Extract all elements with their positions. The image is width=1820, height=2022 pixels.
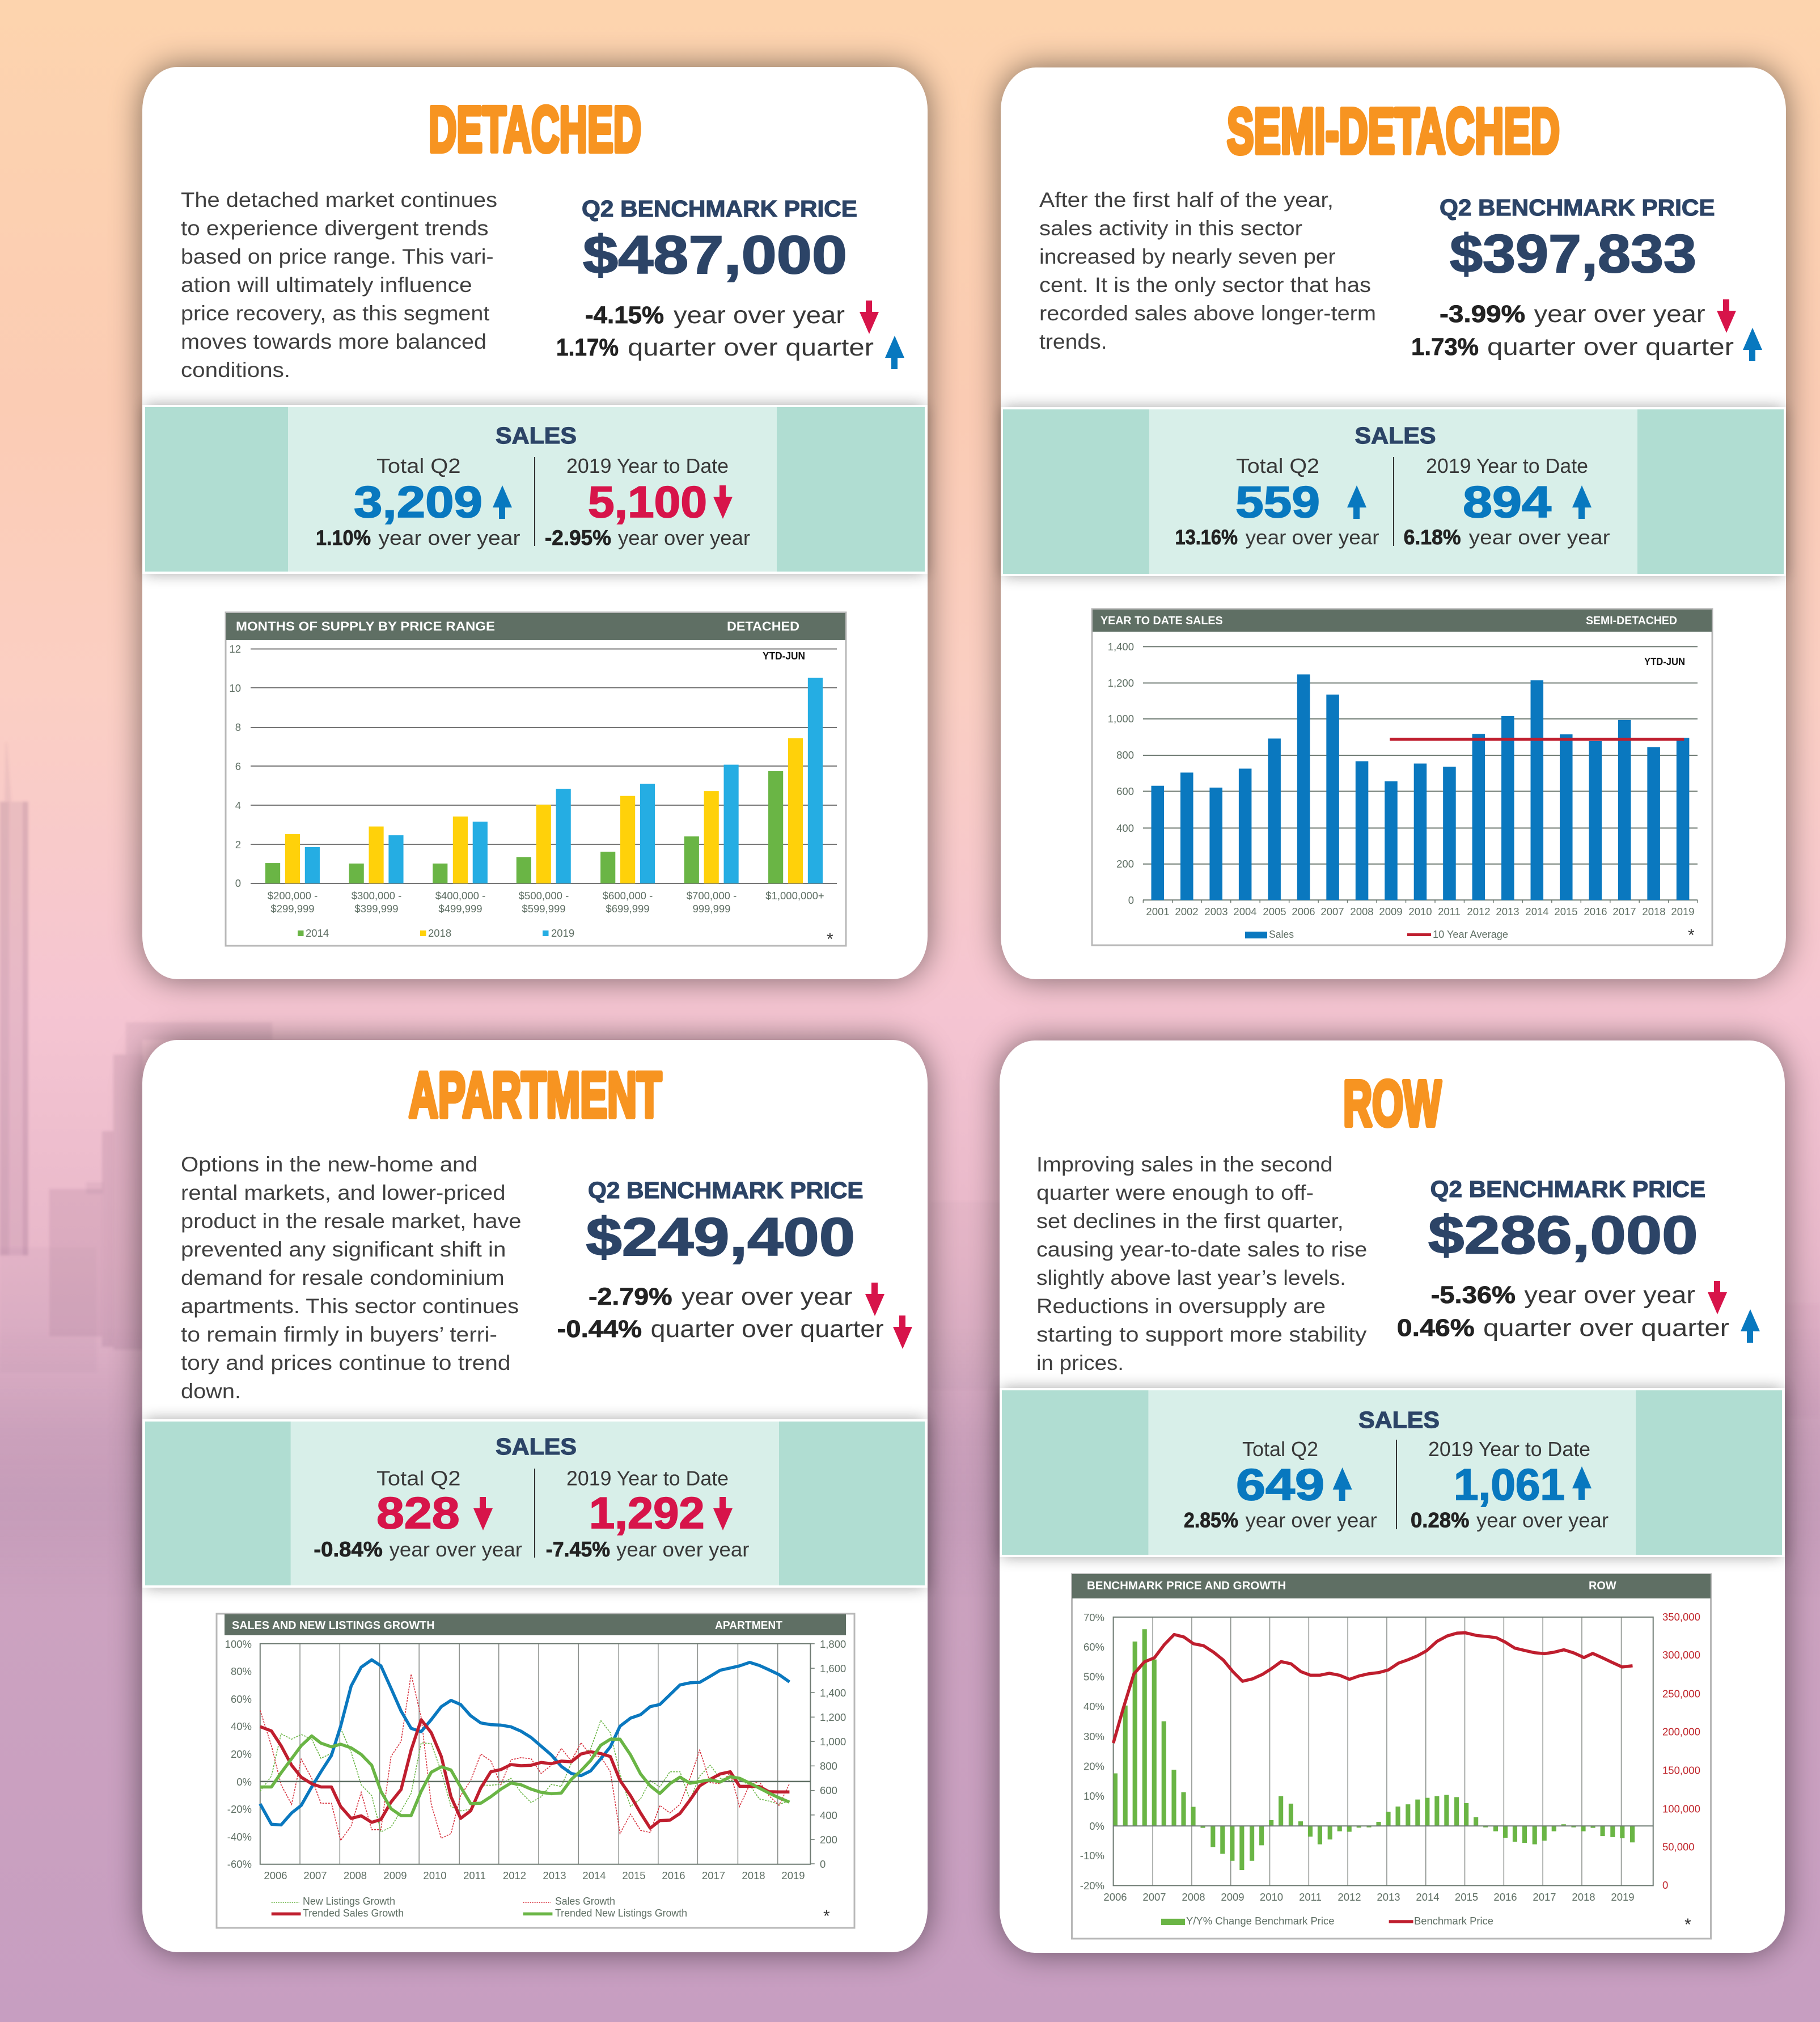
chart: year to date sales: 2005: [1263, 906, 1286, 917]
chart: benchmark price and growth: 40%: [1083, 1700, 1104, 1712]
panel: row: [1000, 1040, 1785, 1953]
text block: detached commentary: based on price range. This vari-: [181, 244, 494, 268]
chart: year to date sales: YEAR TO DATE SALES: [1101, 615, 1223, 627]
text block: detached commentary: moves towards more balanced: [181, 329, 486, 353]
chart: year to date sales: 2015: [1554, 906, 1578, 917]
text block: row commentary: Improving sales in the second: [1036, 1152, 1333, 1176]
chart: year to date sales: 400: [1116, 822, 1134, 834]
chart: sales and new listings growth: 200: [820, 1834, 837, 1846]
text block: detached commentary: conditions.: [181, 358, 290, 382]
chart: benchmark price and growth: 60%: [1083, 1641, 1104, 1653]
text block: apartment commentary: to remain firmly in buyers’ terri-: [181, 1322, 497, 1346]
chart: sales and new listings growth: 20%: [231, 1748, 252, 1760]
total q2 sales: [314, 1466, 522, 1561]
text block: semi-detached commentary: cent. It is the only sector that has: [1039, 273, 1371, 297]
chart: sales and new listings growth: Trended Sales Growth: [303, 1907, 404, 1919]
chart: year to date sales: 2003: [1204, 906, 1228, 917]
chart: sales and new listings growth: 2011: [463, 1869, 486, 1881]
chart: benchmark price and growth: 0%: [1089, 1820, 1104, 1832]
title: row: ROW: [1343, 1068, 1441, 1139]
chart: year to date sales: 2007: [1320, 906, 1344, 917]
chart: year to date sales: [1092, 609, 1712, 945]
chart: sales and new listings growth: 1,000: [820, 1736, 846, 1748]
chart: sales and new listings growth: 2013: [543, 1869, 566, 1881]
chart: sales and new listings growth: 1,200: [820, 1711, 846, 1723]
chart: sales and new listings growth: 80%: [231, 1665, 252, 1677]
total q2 sales: -0.84%: [314, 1538, 383, 1561]
chart: benchmark price and growth: 300,000: [1662, 1649, 1700, 1661]
chart: months of supply by price range: $400,000 -: [435, 890, 485, 902]
chart: benchmark price and growth: 50,000: [1662, 1841, 1695, 1853]
heading: q2 benchmark price: Q2 BENCHMARK PRICE: [1440, 194, 1715, 221]
2019 year to date sales: 894: [1463, 477, 1551, 527]
total q2 sales: year over year: [379, 526, 520, 549]
chart: sales and new listings growth: 2015: [622, 1869, 646, 1881]
quarter over quarter change: [1411, 328, 1762, 361]
chart: benchmark price and growth: 150,000: [1662, 1765, 1700, 1776]
chart: months of supply by price range: $1,000,000+: [765, 890, 824, 902]
total q2 sales: Total Q2: [376, 454, 460, 477]
chart: benchmark price and growth: Benchmark Price: [1414, 1915, 1493, 1927]
total q2 sales: 828: [376, 1488, 460, 1538]
chart: months of supply by price range: DETACHED: [727, 619, 799, 633]
total q2 sales: 3,209: [354, 477, 482, 527]
text block: apartment commentary: demand for resale condominium: [181, 1266, 505, 1289]
chart: sales and new listings growth: 400: [820, 1809, 837, 1821]
chart: months of supply by price range: 6: [235, 760, 241, 772]
2019 year to date sales: -7.45%: [546, 1538, 610, 1561]
chart: sales and new listings growth: 2017: [702, 1869, 725, 1881]
chart: year to date sales: 2016: [1584, 906, 1607, 917]
chart: benchmark price and growth: 2008: [1182, 1891, 1205, 1903]
chart: year to date sales: 2009: [1379, 906, 1403, 917]
2019 year to date sales: 2019 Year to Date: [566, 1466, 729, 1490]
text block: row commentary: slightly above last year’s levels.: [1036, 1266, 1346, 1289]
chart: benchmark price and growth: 2019: [1611, 1891, 1635, 1903]
chart: benchmark price and growth: 2018: [1572, 1891, 1595, 1903]
chart: months of supply by price range: $300,000 -: [352, 890, 401, 902]
chart: benchmark price and growth: 2016: [1493, 1891, 1517, 1903]
chart: months of supply by price range: 999,999: [693, 903, 730, 915]
2019 year to date sales: [1411, 1437, 1609, 1532]
chart: sales and new listings growth: 0%: [236, 1776, 252, 1788]
background: city skyline: [0, 743, 1820, 1418]
text block: semi-detached commentary: sales activity in this sector: [1039, 216, 1302, 240]
chart: year to date sales: 1,400: [1108, 641, 1134, 653]
total q2 sales: year over year: [390, 1538, 522, 1561]
quarter over quarter change: quarter over quarter: [1487, 333, 1734, 361]
chart: months of supply by price range: 8: [235, 721, 241, 733]
text block: semi-detached commentary: recorded sales above longer-term: [1039, 301, 1376, 325]
chart: sales and new listings growth: 2012: [503, 1869, 526, 1881]
chart: sales and new listings growth: SALES AND NEW LISTINGS GROWTH: [232, 1619, 434, 1632]
quarter over quarter change: quarter over quarter: [651, 1315, 884, 1343]
panel: semi-detached sales: [1001, 407, 1786, 576]
text block: apartment commentary: down.: [181, 1379, 241, 1403]
chart: benchmark price and growth: 2014: [1416, 1891, 1440, 1903]
text block: apartment commentary: rental markets, and lower-priced: [181, 1181, 506, 1204]
chart: sales and new listings growth: New Listings Growth: [303, 1895, 395, 1907]
chart: benchmark price and growth: 30%: [1083, 1731, 1104, 1742]
chart: benchmark price and growth: 2012: [1338, 1891, 1361, 1903]
2019 year to date sales: 6.18%: [1404, 526, 1461, 549]
chart: months of supply by price range: 2014: [306, 927, 329, 939]
chart: months of supply by price range: 2019: [551, 927, 574, 939]
text block: detached commentary: [181, 188, 497, 382]
2019 year to date sales: year over year: [1469, 526, 1610, 549]
chart: benchmark price and growth: [1072, 1574, 1711, 1939]
chart: benchmark price and growth: 2009: [1221, 1891, 1245, 1903]
chart: year to date sales: 1,000: [1108, 713, 1134, 725]
heading: sales: SALES: [1358, 1407, 1440, 1433]
chart: year to date sales: 2004: [1233, 906, 1257, 917]
year over year change: [589, 1283, 884, 1316]
total q2 sales: [316, 454, 520, 549]
chart: year to date sales: 10 Year Average: [1433, 928, 1508, 940]
chart: months of supply by price range: 10: [229, 682, 241, 694]
chart: sales and new listings growth: -20%: [227, 1803, 252, 1815]
quarter over quarter change: [557, 1315, 912, 1349]
chart: year to date sales: 800: [1116, 749, 1134, 761]
chart: months of supply by price range: YTD-JUN: [763, 650, 805, 662]
2019 year to date sales: 1,292: [589, 1488, 705, 1538]
chart: year to date sales: *: [1688, 926, 1695, 945]
total q2 sales: 2.85%: [1184, 1509, 1238, 1532]
chart: benchmark price and growth: BENCHMARK PRICE AND GROWTH: [1087, 1580, 1286, 1592]
2019 year to date sales: 1,061: [1454, 1460, 1565, 1509]
chart: benchmark price and growth: Y/Y% Change Benchmark Price: [1186, 1915, 1335, 1927]
heading: q2 benchmark price: Q2 BENCHMARK PRICE: [582, 196, 857, 222]
text block: apartment commentary: [181, 1152, 522, 1403]
year over year change: -4.15%: [585, 302, 664, 329]
chart: benchmark price and growth: 2013: [1377, 1891, 1400, 1903]
text block: row commentary: Reductions in oversupply are: [1036, 1294, 1326, 1318]
text block: semi-detached commentary: increased by nearly seven per: [1039, 244, 1336, 268]
chart: benchmark price and growth: 10%: [1083, 1790, 1104, 1802]
background: tree line: [0, 1327, 1820, 1599]
total q2 sales: 1.10%: [316, 526, 371, 549]
chart: benchmark price and growth: 2007: [1142, 1891, 1166, 1903]
chart: year to date sales: 2018: [1642, 906, 1666, 917]
chart: benchmark price and growth: 70%: [1083, 1611, 1104, 1623]
year over year change: year over year: [682, 1283, 853, 1310]
year over year change: [1440, 299, 1736, 333]
chart: sales and new listings growth: [217, 1614, 854, 1928]
benchmark price value: $286,000: [1428, 1205, 1698, 1266]
chart: benchmark price and growth: 200,000: [1662, 1726, 1700, 1737]
chart: benchmark price and growth: 2015: [1455, 1891, 1478, 1903]
chart: year to date sales: 2019: [1671, 906, 1695, 917]
chart: benchmark price and growth: 2006: [1103, 1891, 1127, 1903]
chart: months of supply by price range: 2: [235, 839, 241, 851]
text block: apartment commentary: apartments. This sector continues: [181, 1294, 519, 1318]
total q2 sales: 559: [1235, 477, 1320, 527]
chart: sales and new listings growth: 60%: [231, 1693, 252, 1705]
chart: sales and new listings growth: Trended New Listings Growth: [555, 1907, 687, 1919]
chart: year to date sales: 2010: [1408, 906, 1432, 917]
chart: sales and new listings growth: 2008: [344, 1869, 367, 1881]
chart: months of supply by price range: [226, 612, 846, 949]
chart: year to date sales: YTD-JUN: [1644, 656, 1685, 667]
heading: sales: SALES: [496, 422, 577, 449]
total q2 sales: year over year: [1246, 1509, 1377, 1532]
chart: year to date sales: 2012: [1467, 906, 1491, 917]
chart: sales and new listings growth: 2010: [423, 1869, 447, 1881]
chart: year to date sales: 2011: [1438, 906, 1461, 917]
chart: sales and new listings growth: 1,400: [820, 1687, 846, 1699]
quarter over quarter change: quarter over quarter: [628, 334, 874, 361]
quarter over quarter change: 1.17%: [556, 334, 619, 361]
chart: sales and new listings growth: 2007: [303, 1869, 327, 1881]
chart: benchmark price and growth: ROW: [1589, 1580, 1616, 1592]
chart: sales and new listings growth: 2018: [742, 1869, 765, 1881]
quarter over quarter change: 0.46%: [1397, 1314, 1475, 1342]
chart: sales and new listings growth: 40%: [231, 1720, 252, 1732]
chart: benchmark price and growth: *: [1684, 1915, 1691, 1934]
2019 year to date sales: year over year: [618, 526, 750, 549]
heading: sales: SALES: [1355, 422, 1436, 449]
chart: months of supply by price range: 0: [235, 877, 241, 889]
chart: months of supply by price range: $700,000 -: [687, 890, 737, 902]
benchmark price value: $397,833: [1450, 224, 1696, 284]
year over year change: year over year: [1534, 301, 1705, 328]
chart: months of supply by price range: $299,999: [270, 903, 315, 915]
2019 year to date sales: [546, 1466, 750, 1561]
text block: row commentary: set declines in the first quarter,: [1036, 1209, 1344, 1233]
total q2 sales: Total Q2: [376, 1466, 460, 1490]
year over year change: -3.99%: [1440, 301, 1525, 328]
total q2 sales: Total Q2: [1236, 454, 1319, 477]
chart: year to date sales: 200: [1116, 858, 1134, 870]
text block: row commentary: causing year-to-date sales to rise: [1036, 1237, 1367, 1261]
2019 year to date sales: 5,100: [588, 477, 707, 527]
year over year change: -5.36%: [1431, 1281, 1516, 1309]
chart: months of supply by price range: $399,999: [354, 903, 399, 915]
chart: months of supply by price range: $599,999: [522, 903, 566, 915]
chart: benchmark price and growth: 2011: [1299, 1891, 1322, 1903]
chart: sales and new listings growth: 100%: [225, 1638, 252, 1650]
chart: months of supply by price range: *: [827, 930, 833, 949]
chart: year to date sales: Sales: [1269, 928, 1294, 940]
text block: detached commentary: to experience divergent trends: [181, 216, 489, 240]
2019 year to date sales: 2019 Year to Date: [566, 454, 729, 477]
chart: year to date sales: 2002: [1175, 906, 1199, 917]
chart: sales and new listings growth: 2006: [264, 1869, 287, 1881]
2019 year to date sales: -2.95%: [545, 526, 611, 549]
2019 year to date sales: year over year: [1476, 1509, 1609, 1532]
chart: months of supply by price range: 12: [229, 643, 241, 655]
text block: apartment commentary: product in the resale market, have: [181, 1209, 522, 1233]
2019 year to date sales: [545, 454, 750, 549]
title: semi-detached: SEMI-DETACHED: [1227, 95, 1560, 167]
panel: detached: [142, 67, 928, 979]
chart: year to date sales: SEMI-DETACHED: [1586, 615, 1677, 627]
year over year change: -2.79%: [589, 1283, 672, 1310]
chart: benchmark price and growth: -10%: [1080, 1850, 1104, 1862]
chart: benchmark price and growth: 0: [1662, 1879, 1668, 1891]
quarter over quarter change: [556, 334, 904, 369]
heading: sales: SALES: [496, 1433, 577, 1460]
year over year change: [585, 301, 879, 334]
text block: semi-detached commentary: [1039, 188, 1376, 353]
chart: sales and new listings growth: APARTMENT: [715, 1619, 782, 1632]
chart: benchmark price and growth: 2017: [1533, 1891, 1556, 1903]
chart: months of supply by price range: $200,000 -: [268, 890, 318, 902]
chart: months of supply by price range: $500,000 -: [519, 890, 569, 902]
text block: row commentary: in prices.: [1036, 1351, 1124, 1374]
text block: detached commentary: ation will ultimately influence: [181, 273, 472, 297]
chart: sales and new listings growth: 1,800: [820, 1638, 846, 1650]
chart: year to date sales: 0: [1128, 894, 1134, 906]
total q2 sales: [1175, 454, 1379, 549]
chart: year to date sales: 2001: [1146, 906, 1170, 917]
chart: months of supply by price range: $699,999: [606, 903, 650, 915]
text block: apartment commentary: Options in the new-home and: [181, 1152, 478, 1176]
chart: sales and new listings growth: Sales Growth: [555, 1895, 615, 1907]
chart: sales and new listings growth: 800: [820, 1760, 837, 1772]
chart: months of supply by price range: MONTHS OF SUPPLY BY PRICE RANGE: [236, 619, 495, 633]
2019 year to date sales: 0.28%: [1411, 1509, 1470, 1532]
total q2 sales: year over year: [1246, 526, 1379, 549]
text block: row commentary: quarter were enough to off-: [1036, 1181, 1314, 1204]
panel: row sales: [1000, 1388, 1785, 1557]
2019 year to date sales: year over year: [616, 1538, 750, 1561]
text block: detached commentary: The detached market continues: [181, 188, 497, 211]
text block: apartment commentary: tory and prices continue to trend: [181, 1351, 510, 1374]
chart: sales and new listings growth: 600: [820, 1784, 837, 1796]
total q2 sales: 649: [1236, 1460, 1324, 1509]
chart: year to date sales: 2017: [1612, 906, 1636, 917]
panel: semi-detached: [1001, 67, 1786, 979]
chart: year to date sales: 2008: [1350, 906, 1374, 917]
chart: benchmark price and growth: 50%: [1083, 1670, 1104, 1683]
chart: sales and new listings growth: -60%: [227, 1858, 252, 1870]
quarter over quarter change: -0.44%: [557, 1315, 642, 1343]
chart: year to date sales: 1,200: [1108, 677, 1134, 689]
chart: months of supply by price range: 4: [235, 800, 241, 811]
title: detached: DETACHED: [429, 94, 641, 165]
total q2 sales: [1184, 1437, 1377, 1532]
year over year change: year over year: [1524, 1281, 1695, 1309]
chart: benchmark price and growth: -20%: [1080, 1880, 1104, 1892]
chart: benchmark price and growth: 2010: [1260, 1891, 1283, 1903]
chart: benchmark price and growth: 250,000: [1662, 1687, 1700, 1700]
chart: sales and new listings growth: 2016: [662, 1869, 685, 1881]
chart: sales and new listings growth: 0: [820, 1858, 826, 1870]
total q2 sales: 13.16%: [1175, 526, 1238, 549]
year over year change: year over year: [674, 302, 845, 329]
2019 year to date sales: 2019 Year to Date: [1428, 1437, 1590, 1461]
chart: year to date sales: 2006: [1292, 906, 1315, 917]
panel: apartment sales: [142, 1419, 928, 1588]
panel: detached sales: [142, 405, 928, 574]
panel: apartment: [142, 1040, 928, 1952]
chart: months of supply by price range: $600,000 -: [603, 890, 653, 902]
chart: sales and new listings growth: 2009: [383, 1869, 407, 1881]
chart: benchmark price and growth: 100,000: [1662, 1803, 1700, 1814]
2019 year to date sales: [1404, 454, 1610, 549]
chart: year to date sales: 2014: [1525, 906, 1549, 917]
chart: sales and new listings growth: *: [823, 1907, 830, 1926]
quarter over quarter change: [1397, 1309, 1760, 1343]
chart: sales and new listings growth: 1,600: [820, 1663, 846, 1674]
chart: sales and new listings growth: -40%: [227, 1831, 252, 1843]
benchmark price value: $249,400: [586, 1207, 855, 1267]
benchmark price value: $487,000: [583, 225, 847, 285]
chart: benchmark price and growth: 20%: [1083, 1760, 1104, 1773]
quarter over quarter change: 1.73%: [1411, 333, 1479, 361]
text block: semi-detached commentary: trends.: [1039, 329, 1107, 353]
text block: semi-detached commentary: After the first half of the year,: [1039, 188, 1334, 211]
heading: q2 benchmark price: Q2 BENCHMARK PRICE: [1430, 1176, 1705, 1202]
chart: sales and new listings growth: 2019: [781, 1869, 805, 1881]
text block: detached commentary: price recovery, as this segment: [181, 301, 490, 325]
heading: q2 benchmark price: Q2 BENCHMARK PRICE: [588, 1177, 864, 1203]
year over year change: [1431, 1281, 1727, 1314]
text block: row commentary: [1036, 1152, 1367, 1374]
chart: months of supply by price range: $499,999: [438, 903, 482, 915]
chart: sales and new listings growth: 2014: [582, 1869, 606, 1881]
chart: year to date sales: 600: [1116, 785, 1134, 797]
title: apartment: APARTMENT: [409, 1059, 662, 1131]
text block: row commentary: starting to support more stability: [1036, 1322, 1367, 1346]
2019 year to date sales: 2019 Year to Date: [1426, 454, 1588, 477]
chart: months of supply by price range: 2018: [428, 927, 451, 939]
chart: year to date sales: 2013: [1496, 906, 1520, 917]
quarter over quarter change: quarter over quarter: [1483, 1314, 1729, 1342]
total q2 sales: Total Q2: [1242, 1437, 1318, 1461]
text block: apartment commentary: prevented any significant shift in: [181, 1237, 506, 1261]
chart: benchmark price and growth: 350,000: [1662, 1611, 1700, 1623]
